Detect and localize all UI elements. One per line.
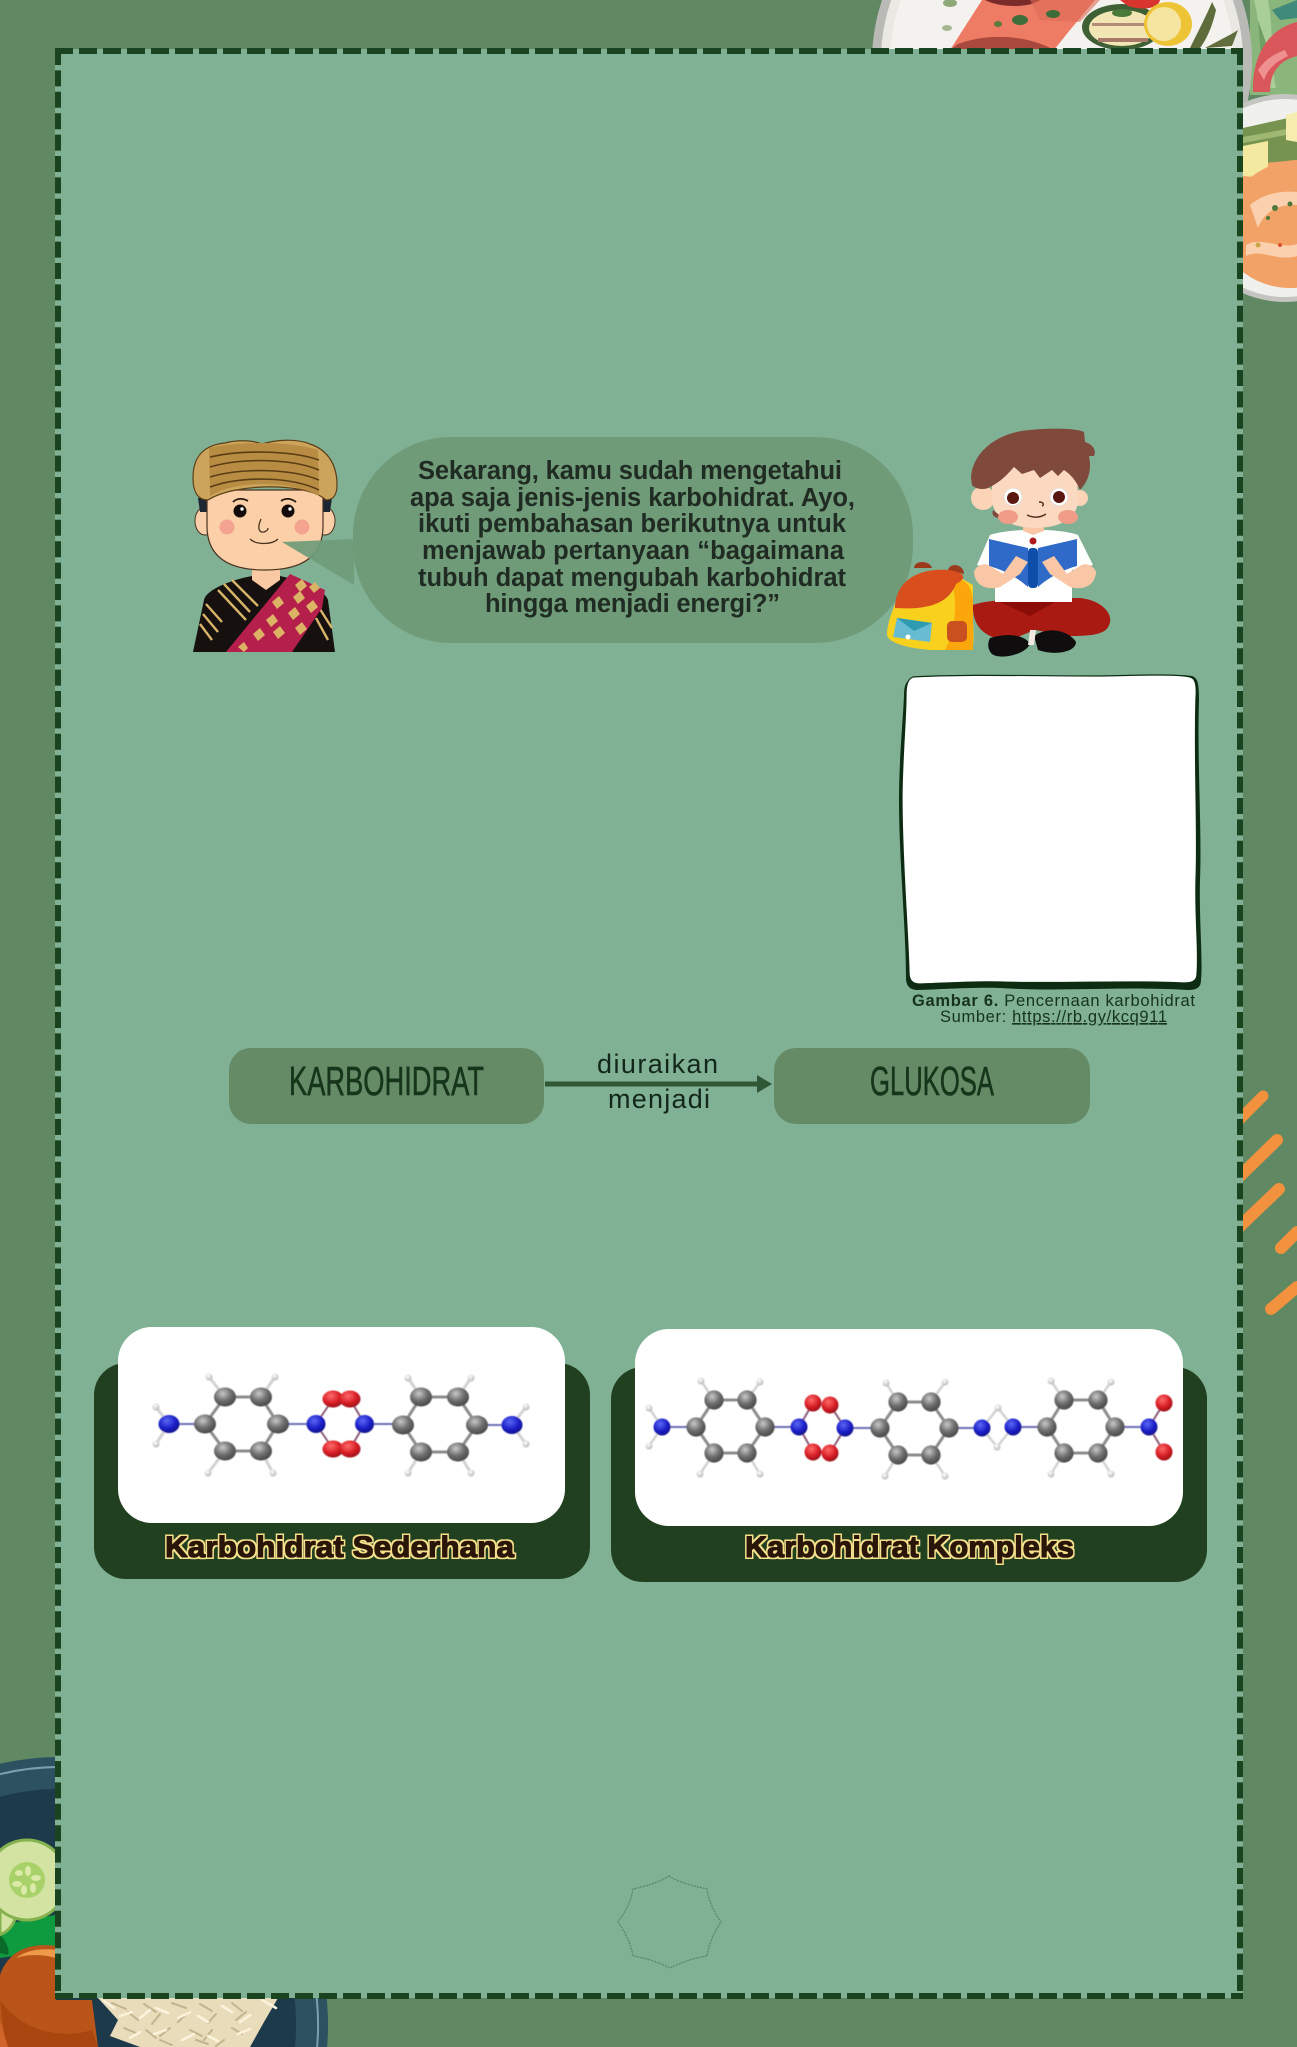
trousers	[973, 598, 1110, 640]
neck	[1023, 522, 1044, 535]
image frame: digestion figure	[899, 675, 1202, 990]
bubble tail	[282, 539, 354, 585]
brows	[233, 499, 296, 502]
dotted star outline	[618, 1876, 721, 1968]
hat	[193, 440, 337, 500]
nose and mouth	[250, 519, 278, 544]
flow box: karbohidrat	[229, 1048, 544, 1124]
sash diamonds	[238, 579, 320, 652]
bubble text: Sekarang, kamu sudah mengetahui	[418, 457, 842, 485]
ears	[971, 486, 995, 510]
bubble text: apa saja jenis-jenis karbohidrat. Ayo,	[410, 484, 855, 512]
molecule: simple carbohydrate	[152, 1374, 530, 1476]
ears	[195, 507, 215, 535]
panel: karbohidrat sederhana	[94, 1327, 590, 1579]
red sash	[226, 574, 325, 652]
character: boy reading with backpack	[887, 429, 1110, 657]
figure caption	[912, 992, 1195, 1026]
bubble text: tubuh dapat mengubah karbohidrat	[418, 564, 846, 592]
shirt gold stripes	[200, 580, 332, 640]
arrow: diuraikan menjadi: menjadi	[608, 1084, 710, 1114]
cheeks	[998, 510, 1018, 524]
collar tie	[1030, 538, 1036, 544]
bubble text: menjawab pertanyaan “bagaimana	[422, 537, 845, 565]
speech bubble	[282, 437, 913, 643]
eyes	[234, 504, 246, 518]
figure caption: Gambar 6. Pencernaan karbohidrat	[912, 992, 1195, 1010]
body and shirt	[193, 576, 335, 652]
hair sides	[198, 498, 210, 512]
food illustration: top right plates	[872, 0, 1297, 302]
panel: karbohidrat kompleks	[611, 1329, 1207, 1582]
character: boy in traditional dress	[193, 440, 337, 652]
decorative orange stripes	[1236, 1096, 1297, 1309]
label: karbohidrat kompleks: Karbohidrat Kompleks	[745, 1531, 1074, 1564]
face	[992, 464, 1078, 528]
shoes	[988, 635, 1030, 657]
arrow: diuraikan menjadi	[545, 1049, 772, 1114]
bubble text: hingga menjadi energi?”	[485, 590, 780, 618]
cheeks	[220, 520, 234, 534]
molecule: complex carbohydrate	[646, 1378, 1172, 1480]
flow box: karbohidrat: KARBOHIDRAT	[289, 1058, 484, 1104]
neck	[252, 566, 280, 590]
hat band stripes	[209, 443, 319, 496]
book	[989, 539, 1028, 587]
arms	[974, 556, 1028, 588]
label: karbohidrat sederhana: Karbohidrat Sederhana	[165, 1531, 514, 1564]
hair	[971, 429, 1095, 490]
nose and mouth	[1027, 502, 1046, 517]
arrow: diuraikan menjadi: diuraikan	[597, 1049, 718, 1079]
eyes	[1004, 488, 1022, 506]
bubble text	[410, 457, 855, 618]
bubble text: ikuti pembahasan berikutnya untuk	[418, 510, 847, 538]
flow box: glukosa: GLUKOSA	[870, 1058, 994, 1104]
figure caption: Sumber: https://rb.gy/kcq911	[940, 1008, 1167, 1026]
food illustration: bottom left bowl	[0, 1757, 328, 2047]
flow box: glukosa	[774, 1048, 1090, 1124]
backpack	[887, 562, 974, 650]
shirt	[977, 530, 1093, 602]
face	[207, 490, 323, 570]
bubble body	[353, 437, 913, 643]
